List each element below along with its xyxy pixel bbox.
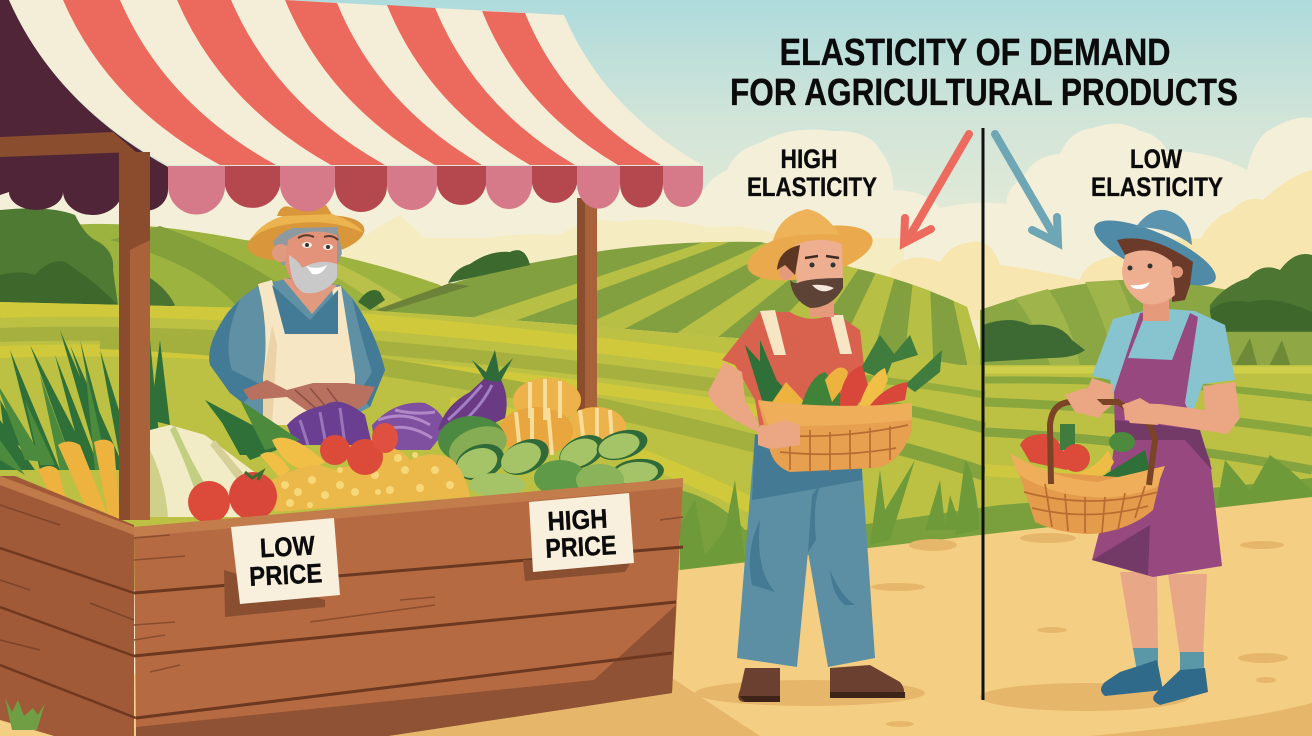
wicker basket: [1010, 453, 1165, 534]
blue shirt: [210, 278, 385, 420]
straw hat: [742, 209, 878, 291]
head: [1117, 238, 1193, 321]
hat: [244, 205, 368, 268]
sign: high price: PRICE: [545, 530, 617, 564]
label: low elasticity: LOW: [1130, 144, 1182, 174]
shirt: [1092, 308, 1235, 420]
left arm and hand: [708, 362, 800, 449]
produce: carrots: [38, 440, 120, 520]
right hand: [758, 420, 800, 449]
awning back shade: [0, 0, 168, 215]
produce: bananas: [260, 438, 325, 478]
vegetables in basket: [745, 335, 942, 410]
label: high elasticity: ELASTICITY: [747, 172, 877, 202]
darker sand: [390, 533, 1312, 736]
farmer: low elasticity: [1010, 208, 1240, 705]
crate left side: [0, 476, 136, 736]
clouds: [0, 117, 1312, 320]
blue hat: [1087, 208, 1223, 298]
basket handle: [1050, 402, 1155, 485]
sign: low price: LOW: [259, 530, 316, 563]
sign: low price: [224, 518, 340, 617]
produce: yellow melons: [499, 378, 626, 456]
produce: leeks and greens: [0, 330, 300, 517]
farm field with stripes: [0, 295, 1312, 595]
sign: high price: HIGH: [547, 504, 608, 537]
center hill: [380, 242, 980, 365]
rear stall post: [577, 198, 597, 413]
grass band along path: [680, 455, 1312, 585]
arrow: low elasticity: [995, 134, 1058, 243]
head: [272, 227, 342, 293]
arrow: high elasticity: [904, 134, 969, 243]
collar: [272, 285, 338, 334]
head: [777, 240, 843, 317]
produce: golden corn: [272, 445, 470, 512]
tree line left: [0, 208, 530, 312]
sign: low price: PRICE: [249, 558, 323, 592]
right hill: [980, 280, 1250, 370]
legs: [1120, 572, 1207, 656]
arms: [1085, 378, 1240, 434]
suspenders: [760, 310, 852, 355]
produce: tomatoes: [188, 423, 398, 523]
grass tuft: [5, 698, 45, 730]
label: low elasticity: ELASTICITY: [1091, 172, 1223, 202]
divider line: [982, 128, 984, 700]
title: ELASTICITY OF DEMAND: [780, 32, 1170, 74]
sign: high price: [523, 493, 634, 581]
hands on handle: [1065, 388, 1160, 425]
produce: purple cabbages and onion: [287, 350, 513, 450]
background sky: [0, 0, 1312, 320]
neck: [282, 278, 337, 314]
farmer: stall vendor: [209, 205, 385, 425]
awning stripes: [9, 0, 702, 165]
overalls: [737, 434, 875, 667]
socks: [1133, 648, 1204, 672]
apron: [258, 280, 355, 425]
boots: [738, 665, 905, 702]
sand path: [0, 497, 1312, 736]
tree line right: [983, 254, 1312, 372]
produce: cucumbers: [438, 416, 665, 497]
crate front: [134, 478, 683, 736]
back hill left: [60, 224, 470, 325]
front stall post: [119, 152, 150, 520]
wicker basket: [758, 400, 912, 472]
vegetables in basket: [1020, 424, 1150, 482]
clasped hands: [243, 380, 375, 417]
shirt: [722, 312, 868, 430]
farmer: high elasticity: [708, 209, 942, 702]
crossbeam: [0, 132, 136, 157]
shoes: [1101, 660, 1208, 705]
purple apron: [1092, 312, 1222, 577]
awning scallops: [168, 166, 703, 214]
label: high elasticity: HIGH: [780, 144, 838, 174]
